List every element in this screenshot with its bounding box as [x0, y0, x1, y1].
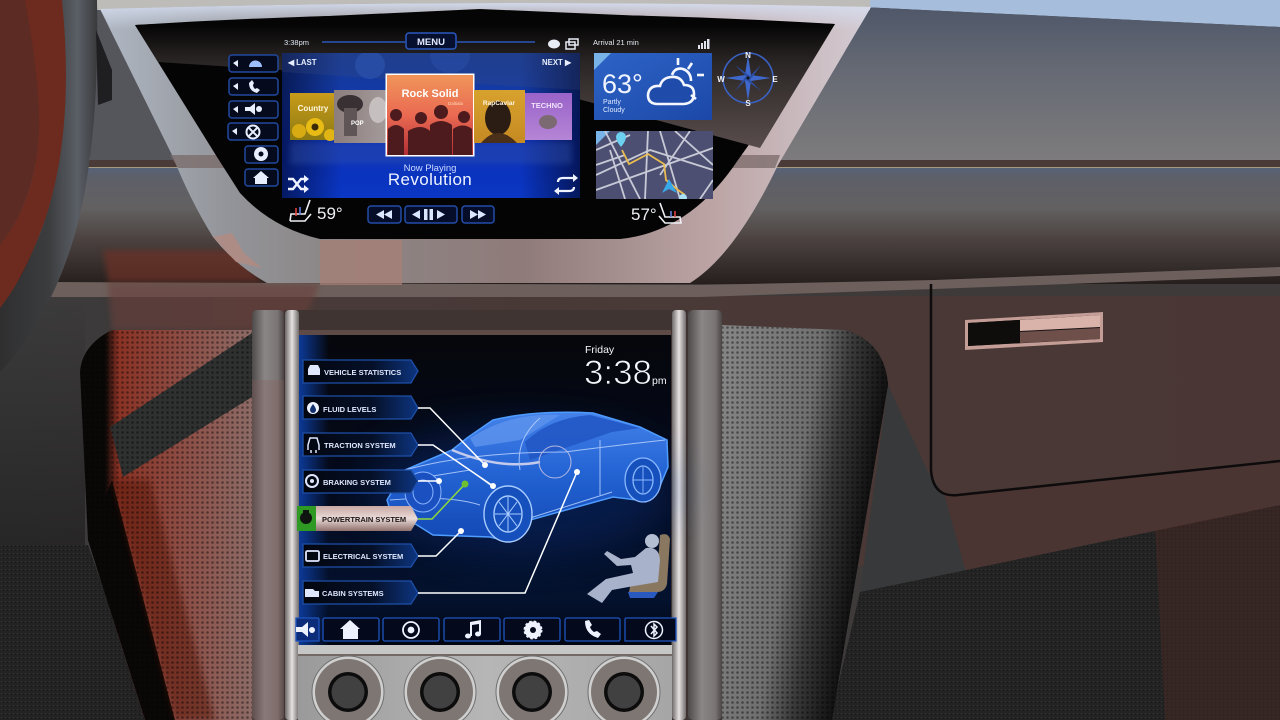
- menu: powertrain system (selected): [297, 506, 418, 531]
- clock: 3:38: [584, 354, 652, 392]
- knob 3: [496, 656, 568, 720]
- menu: traction system: TRACTION SYSTEM: [324, 441, 396, 450]
- icon: phone: [585, 620, 601, 638]
- compass: E: [772, 75, 778, 84]
- album: Rock Solid: Daltiala: [448, 101, 464, 106]
- menu button: [322, 33, 535, 49]
- playback controls: [368, 206, 494, 223]
- lower dashboard band: [0, 168, 1280, 284]
- carpet right: [830, 505, 1280, 720]
- now playing text: Revolution: [388, 170, 472, 189]
- carpet left: [0, 545, 150, 720]
- knobs: [312, 656, 660, 720]
- knob 1: [312, 656, 384, 720]
- repeat icon: [554, 174, 578, 195]
- next label: NEXT ▶: [542, 58, 572, 67]
- album: RapCaviar: [474, 90, 525, 143]
- album: Techno: [525, 93, 572, 140]
- icon: home: [340, 620, 360, 639]
- seated driver icon: [587, 534, 670, 603]
- left side buttons: [228, 55, 278, 186]
- seat heater right: [659, 203, 681, 223]
- menu: cabin systems: [303, 581, 418, 604]
- album: Techno: TECHNO: [531, 101, 563, 110]
- dashboard rim strip: [40, 267, 1280, 297]
- black glass: [135, 14, 835, 239]
- album: Rock Solid: [386, 74, 474, 156]
- weather panel: 63°: [602, 69, 643, 99]
- menu: powertrain system (selected): POWERTRAIN SYSTEM: [322, 515, 406, 524]
- menu: braking system: BRAKING SYSTEM: [323, 478, 391, 487]
- mesh panel right: [722, 325, 888, 720]
- compass: [717, 51, 778, 108]
- icon: speaker: [296, 622, 315, 637]
- weather panel: [594, 53, 712, 120]
- music panel: [282, 37, 580, 198]
- menu: braking system: [303, 470, 418, 493]
- compass: W: [717, 75, 725, 84]
- menu: cabin systems: CABIN SYSTEMS: [322, 589, 384, 598]
- silver rails: [252, 310, 722, 720]
- dashboard seam: [0, 160, 1280, 167]
- menu: traction system: [303, 433, 418, 456]
- silver control plate: [298, 645, 672, 720]
- message icons: [548, 39, 578, 49]
- date label: Friday: [585, 344, 615, 356]
- grey side wedge: [860, 385, 966, 592]
- album: RapCaviar: RapCaviar: [483, 100, 516, 107]
- red glow patches: [103, 250, 262, 282]
- console base: [284, 310, 688, 720]
- red carpet tint: [1155, 505, 1280, 720]
- weather panel: Partly: [603, 99, 621, 106]
- mesh panel left: [75, 325, 255, 720]
- menu: electrical system: ELECTRICAL SYSTEM: [323, 552, 403, 561]
- arrival label: Arrival 21 min: [593, 38, 639, 47]
- now playing text: Now Playing: [404, 163, 456, 174]
- windshield strip: [860, 0, 1280, 27]
- map panel: [596, 131, 713, 202]
- lower dashboard panel: [0, 296, 1280, 566]
- upper dashboard surface: [85, 0, 1280, 160]
- menu button: MENU: [417, 37, 445, 48]
- compass: N: [745, 51, 751, 60]
- album: Country: Country: [298, 104, 329, 113]
- knob 2: [404, 656, 476, 720]
- icon: navigation: [403, 622, 419, 638]
- rear wheel: [625, 458, 661, 502]
- shuffle icon: [288, 175, 309, 193]
- album: Country: [290, 93, 336, 141]
- temperature right: 57°: [631, 205, 657, 224]
- glove box handle: [965, 312, 1103, 350]
- top trim strip: [85, 0, 870, 10]
- weather icon: [648, 58, 704, 104]
- time label: 3:38pm: [284, 38, 309, 47]
- far wheel: [405, 472, 441, 512]
- signal bars: [698, 39, 710, 49]
- last label: ◀ LAST: [287, 58, 317, 67]
- glove box: [931, 284, 1280, 495]
- icon: settings gear: [524, 622, 542, 638]
- upper display: [100, 3, 871, 285]
- glass reflection: [135, 9, 835, 148]
- icon: music note: [465, 620, 481, 638]
- steering wheel: [0, 0, 112, 372]
- icon: bluetooth: [646, 622, 662, 638]
- bottom icon bar: [296, 618, 676, 641]
- compass: S: [745, 99, 751, 108]
- panel under glove box: [945, 461, 1280, 572]
- leader lines: [418, 408, 580, 593]
- clock: pm: [652, 375, 667, 387]
- album: Rock Solid: Rock Solid: [402, 88, 458, 100]
- album: Pop: [334, 90, 387, 143]
- menu: fluid levels: [303, 396, 418, 419]
- lower display: [296, 330, 676, 645]
- display bezel: [100, 3, 871, 283]
- menu: fluid levels: FLUID LEVELS: [323, 405, 376, 414]
- car wireframe: [365, 412, 675, 555]
- menu: vehicle statistics: [303, 360, 418, 383]
- temperature left: 59°: [317, 204, 343, 223]
- front wheel: [484, 486, 532, 542]
- album: Pop: POP: [351, 121, 364, 127]
- wheel stalk: [96, 30, 112, 105]
- weather panel: Cloudy: [603, 107, 625, 114]
- knob 4: [588, 656, 660, 720]
- menu: electrical system: [303, 544, 418, 567]
- menu list: [297, 360, 418, 604]
- menu: vehicle statistics: VEHICLE STATISTICS: [324, 368, 401, 377]
- seat heater left: [290, 200, 311, 221]
